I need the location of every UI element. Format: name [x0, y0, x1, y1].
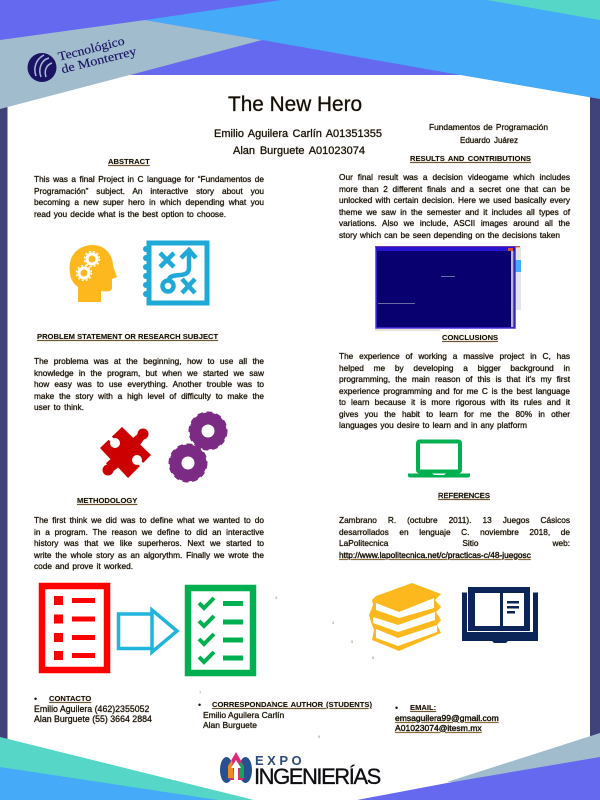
- text: abstract: becoming a new super hero in which depending what you: [34, 197, 264, 207]
- icon: head with gears: [70, 245, 117, 302]
- course and teacher: Eduardo Juárez: [460, 136, 518, 145]
- text: abstract: read you decide what is the best option to choose.: [34, 208, 226, 218]
- contact block: Alan Burguete (55) 3664 2884: [34, 714, 152, 724]
- text: conclusions: The experience of working a massive project in C, has: [339, 351, 570, 361]
- logo: Tecnológico de Monterrey: [28, 34, 139, 82]
- heading: abstract: ABSTRACT: [108, 157, 150, 166]
- text: abstract: This was a final Project in C language for “Fundamentos de: [34, 174, 264, 184]
- authors: [214, 128, 382, 157]
- heading: conclusions: CONCLUSIONS: [442, 333, 498, 342]
- course and teacher: Fundamentos de Programación: [429, 122, 548, 132]
- correspondence block: •: [198, 700, 201, 710]
- small stray numbers: 4: [332, 620, 334, 625]
- small stray numbers: 5: [351, 639, 353, 644]
- text: abstract: [34, 174, 264, 219]
- correspondence block: Emilio Aguilera Carlín: [203, 710, 284, 720]
- correspondence block: Alan Burguete: [203, 720, 257, 730]
- text: problem statement: The problema was at the beginning, how to use all the: [34, 356, 264, 366]
- text: results: more than 2 different finals and a secret one that can be: [339, 184, 570, 194]
- small stray numbers: 9: [318, 734, 320, 739]
- correspondence block: [198, 700, 372, 730]
- email block: A01023074@itesm.mx: [395, 722, 482, 732]
- text: problem statement: user to think.: [34, 402, 84, 412]
- text: methodology: write the whole story as an algorythm. Finally we wrote the: [34, 550, 264, 560]
- text: problem statement: make the story with a high level of difficulty to make the: [34, 390, 264, 400]
- text: conclusions: languages you desire to learn and in any platform: [339, 420, 527, 430]
- icon: strategy notebook: [143, 240, 210, 306]
- logo text: INGENIERÍAS: INGENIERÍAS: [254, 764, 380, 789]
- text: conclusions: to learn because it is more rigorous with its rules and it: [339, 397, 570, 407]
- contact block: [34, 694, 152, 724]
- email block: •: [395, 703, 398, 713]
- text: conclusions: helped me by developing a bigger background in: [339, 362, 570, 372]
- text: results: [338, 172, 570, 240]
- email block: [394, 703, 500, 734]
- logo: Tecnológico de Monterrey: de Monterrey: [60, 44, 139, 76]
- heading: references: REFERENCES: [438, 491, 490, 500]
- title: The New Hero: [228, 93, 362, 116]
- contact block: CONTACTO: [49, 694, 91, 703]
- heading: results: RESULTS AND CONTRIBUTIONS: [410, 154, 531, 163]
- text: methodology: The first think we did was to define what we wanted to do: [34, 515, 264, 525]
- text: abstract: Programación” subject. An interactive story about you: [34, 186, 264, 196]
- icon: red list: [38, 582, 110, 674]
- text: references: LaPolitecnica Sitio web:: [339, 538, 570, 548]
- text: methodology: in a program. The reason we define to did an interactive: [34, 526, 264, 536]
- email block: emsaguilera99@gmail.com: [395, 712, 499, 722]
- text: references: Zambrano R. (octubre 2011). 13 Juegos Cásicos: [339, 515, 570, 525]
- logo text: EXPO: EXPO: [255, 753, 305, 768]
- small stray numbers: 6: [372, 655, 374, 660]
- text: conclusions: [338, 351, 570, 430]
- authors: Alan Burguete A01023074: [233, 145, 365, 157]
- icon: stack of books: [369, 583, 441, 651]
- icon: green checklist: [184, 584, 256, 676]
- correspondence block: CORRESPONDANCE AUTHOR (STUDENTS): [212, 700, 372, 709]
- text: problem statement: how easy was to use everything. Another trouble was to: [34, 379, 264, 389]
- text: results: theme we saw in the semester and it includes all types of: [339, 206, 570, 216]
- text: conclusions: gives you the habit to learn for me the 80% in other: [339, 408, 570, 418]
- arrow: [116, 606, 180, 656]
- text: conclusions: programming, the main reason of this is that it's my first: [339, 374, 570, 384]
- heading: problem statement: PROBLEM STATEMENT OR RESEARCH SUBJECT: [37, 332, 218, 341]
- text: methodology: code and prove it worked.: [34, 561, 133, 571]
- icon: laptop: [408, 440, 470, 478]
- text: references: [338, 515, 570, 561]
- text: references: desarrollados en lenguaje C. noviembre 2018, de: [339, 526, 570, 536]
- icon: puzzle piece: [100, 427, 151, 478]
- email block: EMAIL:: [410, 703, 436, 712]
- heading: methodology: METHODOLOGY: [77, 496, 137, 505]
- text: references: http://www.lapolitecnica.net/c/practicas-c/48-juegosc: [339, 550, 531, 560]
- logo: Expo Ingenierías: [220, 752, 380, 789]
- text: results: unlocked with certain decision. Here we used basically every: [339, 195, 570, 205]
- text: results: story which can be seen depending on the decisions taken: [339, 230, 560, 240]
- text: methodology: [34, 515, 264, 571]
- authors: Emilio Aguilera Carlín A01351355: [214, 128, 382, 140]
- text: methodology: history was that we like superheros. Next we started to: [34, 538, 264, 548]
- small stray numbers: 7: [199, 690, 201, 695]
- text: problem statement: knowledge in the program, but when we started we saw: [34, 368, 264, 378]
- icon: open book: [462, 587, 538, 643]
- text: results: Our final result was a decision videogame which includes: [339, 172, 570, 182]
- text: problem statement: [34, 356, 264, 412]
- logo: Tecnológico de Monterrey: Tecnológico: [57, 34, 126, 64]
- icon: flame emblem: [220, 752, 252, 783]
- small stray numbers: 8: [271, 699, 273, 704]
- screenshot: game console: [375, 246, 521, 331]
- small stray numbers: 3: [275, 595, 277, 600]
- icon: gears: [168, 412, 228, 482]
- text: conclusions: experience programming and for me C is the best language: [339, 386, 570, 396]
- course and teacher: [429, 122, 548, 145]
- contact block: •: [34, 694, 37, 704]
- contact block: Emilio Aguilera (462)2355052: [34, 704, 149, 714]
- text: results: variations. Also we include, ASCII images around all the: [339, 218, 570, 228]
